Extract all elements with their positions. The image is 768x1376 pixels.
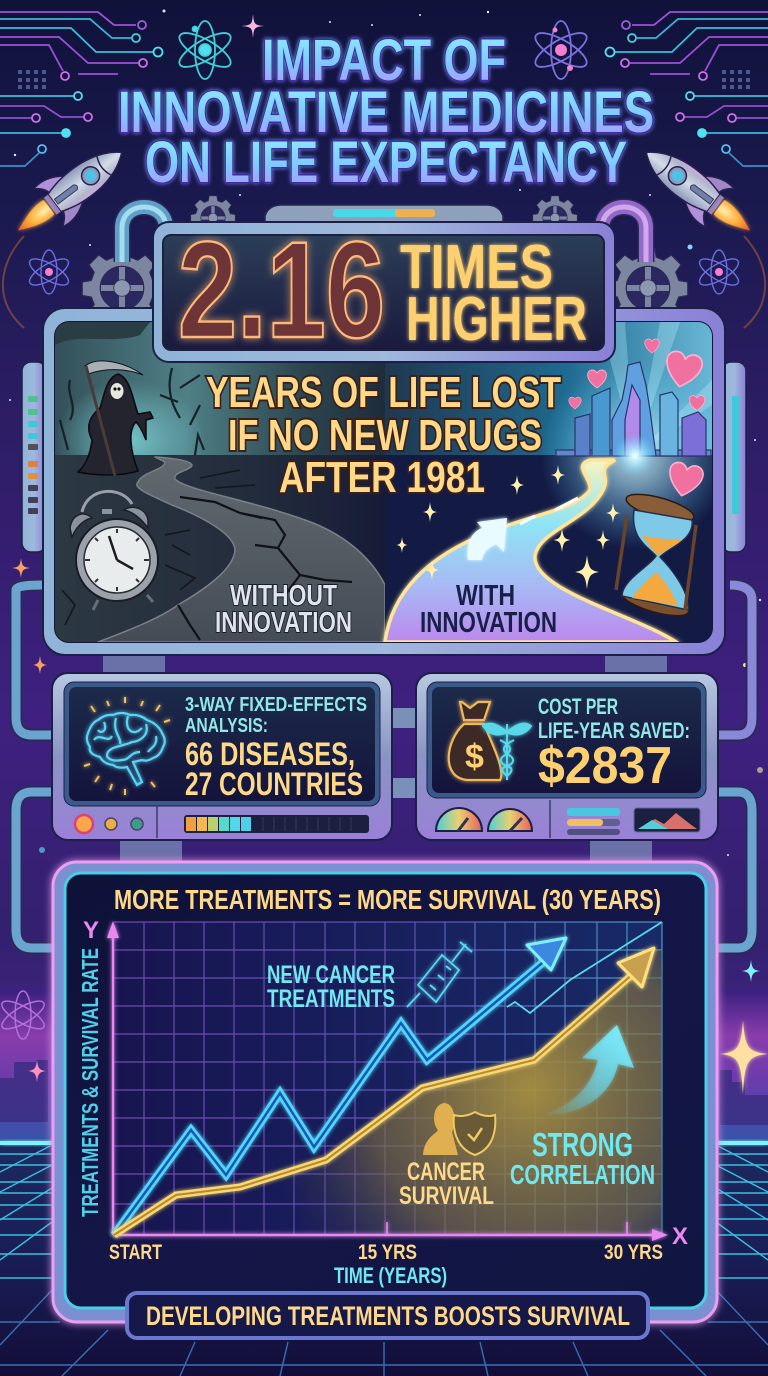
text: cost label: COST PER <box>538 694 618 719</box>
hero heading: YEARS OF LIFE LOST <box>206 368 561 417</box>
icon: future city <box>556 362 711 456</box>
big number suffix: TIMES <box>400 233 553 302</box>
icon: sparkles <box>396 465 620 589</box>
hero heading: IF NO NEW DRUGS <box>228 411 542 460</box>
big number suffix: HIGHER <box>406 285 587 354</box>
text: analysis values <box>185 736 363 802</box>
line chart <box>77 917 688 1288</box>
text: analysis label <box>185 693 367 737</box>
scene: bright side <box>385 322 730 642</box>
title: ON LIFE EXPECTANCY <box>145 130 627 195</box>
icon: money bag: $ <box>465 738 484 776</box>
title <box>118 28 654 195</box>
text: analysis values: 66 DISEASES, <box>185 736 355 772</box>
label: strong correlation: CORRELATION <box>510 1159 655 1190</box>
label: new cancer treatments: TREATMENTS <box>267 985 395 1013</box>
thin trace <box>507 922 662 1013</box>
survival area <box>294 950 662 1234</box>
status lights <box>75 815 143 833</box>
label: with innovation <box>420 580 557 639</box>
machinery behind banner <box>82 196 688 328</box>
label: strong correlation <box>510 1126 655 1190</box>
text: analysis values: 27 COUNTRIES <box>185 766 363 802</box>
circuit traces right <box>606 12 768 166</box>
icon: money bag <box>449 702 501 780</box>
icon: person and shield <box>423 1103 495 1155</box>
axis labels: 15 YRS <box>358 1241 417 1264</box>
series: new cancer treatments <box>114 938 566 1235</box>
big number: 2.16 <box>178 214 385 367</box>
gauges <box>436 808 532 831</box>
text: analysis label: 3-WAY FIXED-EFFECTS <box>185 693 367 716</box>
axis labels: X <box>672 1223 688 1250</box>
icon: atom small right <box>696 250 742 294</box>
side strip right <box>722 362 746 552</box>
label: with innovation: WITH <box>456 580 515 612</box>
big number suffix <box>400 233 587 354</box>
label: cancer survival: CANCER <box>407 1158 485 1186</box>
label: cancer survival <box>399 1158 494 1210</box>
rocket trail right <box>744 236 765 328</box>
label: without innovation: WITHOUT <box>230 580 337 612</box>
side pipes <box>16 585 752 948</box>
rocket trail left <box>3 236 24 328</box>
icon: atom violet <box>531 21 591 79</box>
icon: hearts <box>569 339 705 499</box>
text: cost value: $2837 <box>538 737 672 795</box>
icon: hourglass <box>616 489 696 621</box>
circuit traces left <box>0 12 162 166</box>
icon: grim reaper <box>78 361 153 476</box>
series: cancer survival <box>114 948 654 1235</box>
conclusion banner <box>127 1293 648 1338</box>
panel: analysis <box>52 673 392 840</box>
icon: atom small left <box>26 250 72 294</box>
axes <box>107 921 668 1241</box>
grid <box>114 922 662 1235</box>
icon: alarm clock <box>70 491 158 610</box>
scene: dark side <box>55 322 385 642</box>
icon: atom cyan <box>175 21 235 79</box>
side strip left <box>22 362 46 552</box>
axis labels: TIME (YEARS) <box>334 1263 447 1288</box>
meters <box>567 808 620 835</box>
icon: atom lower left <box>0 991 48 1039</box>
icon: correlation arrow <box>539 1025 634 1115</box>
icon: curved arrow <box>468 518 507 560</box>
conclusion banner: DEVELOPING TREATMENTS BOOSTS SURVIVAL <box>146 1301 630 1331</box>
axis labels: 30 YRS <box>604 1241 663 1264</box>
label: new cancer treatments <box>267 961 395 1013</box>
hero heading <box>206 368 561 502</box>
text: analysis label: ANALYSIS: <box>185 714 268 737</box>
icon: rocket right <box>631 133 765 250</box>
hero heading: AFTER 1981 <box>279 453 485 502</box>
label: new cancer treatments: NEW CANCER <box>267 961 395 989</box>
label: cancer survival: SURVIVAL <box>399 1182 494 1210</box>
text: cost label: LIFE-YEAR SAVED: <box>538 718 690 743</box>
title: IMPACT OF <box>262 28 506 93</box>
axis labels: Y <box>83 917 99 944</box>
label: with innovation: INNOVATION <box>420 607 557 639</box>
icon: caduceus <box>483 724 531 780</box>
icon: rocket left <box>3 133 137 250</box>
axis labels <box>77 917 688 1288</box>
axis labels: TREATMENTS & SURVIVAL RATE <box>77 948 103 1217</box>
icon: syringe <box>407 942 472 1007</box>
label: without innovation: INNOVATION <box>215 607 352 639</box>
panel: headline banner <box>153 214 615 367</box>
panel: chart <box>53 862 717 1338</box>
progress bar <box>184 815 369 833</box>
panel: hero comparison <box>43 308 730 655</box>
label: without innovation <box>215 580 352 639</box>
label: strong correlation: STRONG <box>532 1126 633 1163</box>
panel: cost <box>416 673 718 840</box>
text: cost label <box>538 694 690 743</box>
axis labels: START <box>109 1241 162 1264</box>
mini chart <box>634 808 700 832</box>
icon: brain <box>84 697 170 795</box>
